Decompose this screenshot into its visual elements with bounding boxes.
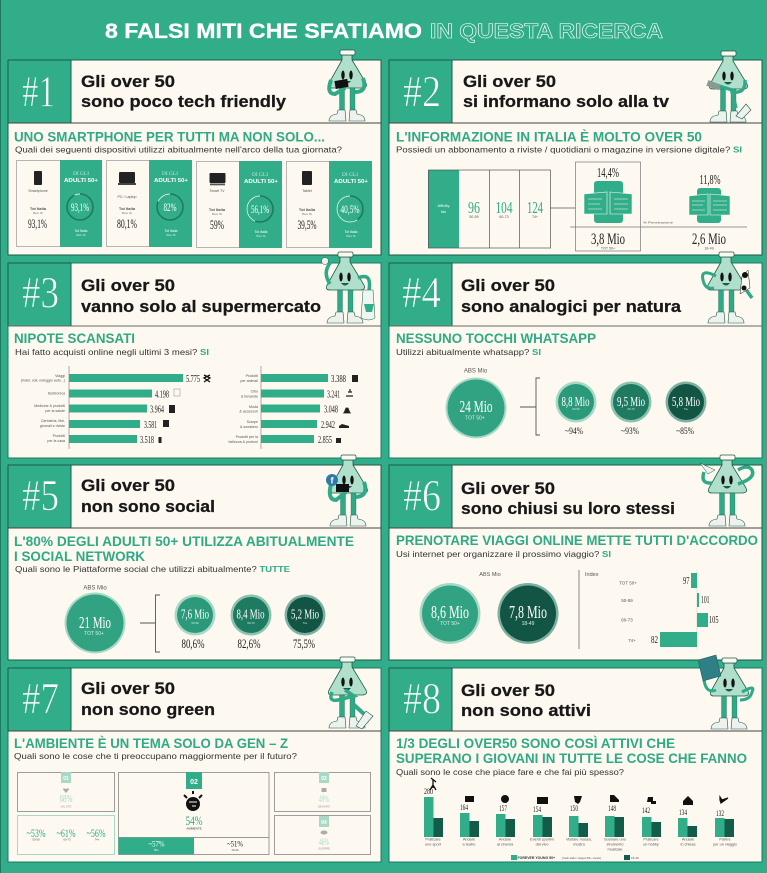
card: PC / laptop: DI GLI — [162, 171, 178, 177]
number: #8 — [403, 674, 441, 723]
heading: Gli over 50 — [461, 682, 555, 700]
heading: sono poco tech friendly — [81, 93, 287, 111]
card: smartphone: Tot Italia — [30, 206, 47, 211]
heading — [461, 480, 675, 518]
heading: vanno solo al supermercato — [81, 298, 321, 316]
heading — [81, 277, 321, 316]
card: smartphone: Tot Italia — [74, 229, 88, 233]
circles: TOT 50+ — [440, 621, 460, 627]
card: age breakdown: ~56% — [86, 826, 106, 840]
index chart — [585, 570, 718, 649]
index chart: 101 — [701, 595, 710, 606]
subheading: NESSUNO TOCCHI WHATSAPP — [396, 330, 596, 346]
bar chart: left: (hotel, voli, noleggio auto...) — [21, 378, 65, 382]
bar chart: left: Elettronica — [48, 392, 65, 396]
age circles: 8,8 Mio — [562, 395, 590, 410]
legend: 18-49 — [631, 856, 639, 860]
bar chart: activities: Andare — [499, 838, 511, 842]
bar chart: activities: Andare — [463, 838, 475, 842]
bar chart: activities: Eventi sportivi — [530, 838, 554, 842]
number: #7 — [22, 674, 59, 723]
heading — [81, 477, 215, 516]
number: #1 — [22, 67, 55, 116]
bar chart: activities: 157 — [499, 803, 507, 813]
age circles: 74+ — [684, 407, 689, 411]
bar chart: right: 3.048 — [324, 404, 338, 416]
index chart: TOT 50+ — [619, 580, 637, 586]
bar chart: left: 4.198 — [155, 390, 169, 400]
card: smart TV: Tot Italia — [254, 230, 268, 234]
card: salute: 01 — [63, 776, 69, 782]
affinity table: Affinity — [438, 203, 449, 208]
age circles: 9,5 Mio — [617, 395, 645, 410]
card: denaro: 49% — [319, 794, 329, 804]
heading: sono analogici per natura — [461, 298, 682, 316]
card: tablet: Pen. % — [302, 212, 312, 216]
age circles — [556, 382, 706, 436]
subheading — [14, 533, 354, 564]
question: Quali dei seguenti dispositivi utilizzi abitualmente nell'arco della tua giornata? — [15, 144, 342, 154]
bar chart: activities: mostra — [573, 842, 586, 846]
subheading: L'80% DEGLI ADULTI 50+ UTILIZZA ABITUALMENTE — [14, 533, 354, 549]
total circle: 21 Mio — [79, 613, 111, 632]
bar chart: right: & accessori — [239, 410, 258, 414]
card: tablet: DI GLI — [342, 172, 358, 178]
bar chart: right: Scarpe — [247, 420, 258, 424]
heading: Gli over 50 — [81, 477, 175, 495]
card: smart TV — [196, 161, 282, 248]
mascot: flask reading — [706, 51, 751, 122]
total circle: ABS Mio — [464, 368, 488, 374]
number: #6 — [403, 471, 441, 520]
number: #2 — [403, 67, 441, 116]
bar chart: activities: 154 — [533, 804, 541, 814]
legend — [511, 855, 639, 860]
card: tablet: Tablet — [302, 189, 312, 193]
icon: earth — [184, 791, 202, 811]
card: PC / laptop: 82% — [164, 200, 176, 214]
panel: #3 supermercato — [8, 252, 381, 458]
heading: non sono green — [81, 701, 215, 719]
card: age breakdown: 60-73 — [63, 838, 71, 842]
card: smart TV: DI GLI — [252, 172, 268, 178]
age circles: 60-73 — [627, 407, 635, 411]
question: Quali sono le Piattaforme social che utilizzi abitualmente? TUTTE — [15, 564, 290, 574]
affinity table: 104 — [496, 198, 512, 217]
subheading: L'INFORMAZIONE IN ITALIA È MOLTO OVER 50 — [396, 128, 702, 144]
bar chart: right: 2.942 — [321, 420, 335, 431]
heading — [81, 680, 215, 719]
mascot: flask pointing — [700, 455, 753, 526]
card: age breakdown: ~61% — [56, 826, 76, 840]
bar chart: left: Viaggi — [55, 374, 65, 378]
age circles: ~93% — [621, 426, 639, 436]
heading: non sono social — [81, 498, 215, 516]
bar chart: left: 3.518 — [140, 435, 154, 446]
panel: #5 social — [8, 455, 381, 660]
subheading: L'AMBIENTE È UN TEMA SOLO DA GEN – Z — [14, 735, 288, 751]
bar chart: activities: 132 — [716, 808, 724, 818]
card: salute: SALUTE — [61, 804, 72, 808]
affinity table: 124 — [527, 198, 543, 217]
bar chart: activities: al cinema — [497, 842, 514, 846]
panel: #1 tech friendly — [8, 50, 381, 255]
card: smartphone: ADULTI 50+ — [64, 178, 98, 184]
bar chart: right: bellezza & profumi — [228, 440, 258, 444]
heading: sono chiusi su loro stessi — [461, 500, 675, 518]
bar chart: activities: 148 — [608, 803, 616, 813]
question: Hai fatto acquisti online negli ultimi 3 mesi? SI — [15, 347, 209, 357]
bar chart: left: 3.581 — [144, 420, 157, 431]
bar chart: activities: per un viaggio — [713, 842, 737, 846]
bar chart: activities: 164 — [460, 802, 468, 812]
bracket — [520, 378, 540, 435]
card: smart TV: Pen. % — [212, 212, 222, 216]
bar chart: activities: un hobby — [643, 842, 659, 846]
stat: 18-49 digital readers: 2,6 Mio — [692, 231, 726, 248]
panel: #7 green — [8, 657, 381, 862]
total circle: TOT 50+ — [465, 416, 485, 422]
card: ambiente — [118, 772, 269, 854]
card: tablet: Tot Italia — [299, 207, 316, 212]
bar chart: activities: in chiesa — [680, 842, 696, 846]
subheading: 1/3 DEGLI OVER50 SONO COSÌ ATTIVI CHE — [396, 735, 675, 751]
question: Utilizzi abitualmente whatsapp? SI — [396, 347, 541, 357]
card: PC / laptop: Pen. % — [166, 233, 176, 237]
age circles: 5,8 Mio — [672, 395, 700, 410]
bar chart: activities: 134 — [679, 807, 687, 817]
heading — [463, 73, 670, 111]
stat: 50+ digital readers: 14,4% — [597, 166, 619, 181]
total circle — [64, 586, 126, 654]
card: tablet: 39,5% — [298, 218, 316, 232]
heading: Gli over 50 — [461, 480, 555, 498]
bar chart: activities: Andare — [682, 838, 694, 842]
bar chart: activities: musicale — [608, 848, 622, 852]
bar chart: left: 3.964 — [150, 404, 164, 416]
card: salute — [18, 772, 114, 812]
card: PC / laptop: ADULTI 50+ — [154, 178, 188, 184]
heading: non sono attivi — [461, 702, 591, 720]
bar chart: activities: Partire — [719, 838, 731, 842]
heading — [461, 682, 591, 720]
bar chart: activities: Visitare museo, — [566, 838, 592, 842]
card: smart TV: Pen. % — [256, 234, 266, 238]
bar chart: activities: Praticare — [425, 838, 441, 842]
number: #4 — [402, 268, 441, 317]
total circle: TOT 50+ — [84, 631, 104, 637]
heading — [461, 277, 682, 316]
affinity table — [428, 170, 575, 248]
card: age breakdown: ~53% — [26, 826, 46, 840]
card: PC / laptop: PC / Laptop — [118, 195, 136, 199]
card: age breakdown: 74+ — [95, 838, 100, 842]
bar chart: right: 2.855 — [318, 435, 332, 446]
card: tablet: Pen. % — [346, 234, 356, 238]
circles — [420, 572, 558, 644]
index chart: 74+ — [628, 638, 636, 643]
circles: 7,8 Mio — [509, 602, 547, 622]
bar chart: right: Prodotti per la — [236, 435, 258, 439]
affinity table: idx — [441, 209, 446, 214]
bar chart: left: per la salute — [45, 409, 65, 413]
card: guerre: GUERRE — [318, 846, 330, 850]
age circles: 80,6% — [182, 637, 204, 651]
subheading: SUPERANO I GIOVANI IN TUTTE LE COSE CHE FANNO — [396, 750, 747, 766]
panel: #8 attivi — [389, 655, 762, 862]
bar chart: right: 3.241 — [327, 390, 340, 400]
card: ambiente: ~57% — [148, 838, 164, 848]
heading: Gli over 50 — [81, 680, 175, 698]
affinity table: 74+ — [532, 215, 538, 219]
bar chart: activities: 150 — [570, 803, 578, 813]
age circles: 82,6% — [238, 637, 260, 651]
card: smartphone: Smartphone — [28, 189, 48, 193]
question: Usi internet per organizzare il prossimo viaggio? SI — [396, 549, 611, 559]
title: 8 FALSI MITI CHE SFATIAMO — [105, 20, 422, 43]
card: smart TV: 56,1% — [251, 202, 269, 216]
card: age breakdown — [18, 816, 114, 854]
affinity table: 96 — [468, 198, 480, 217]
stat: 50+ digital readers — [576, 162, 640, 251]
card: PC / laptop: Pen. % — [122, 211, 132, 215]
heading: si informano solo alla tv — [463, 93, 670, 111]
age circles: 5,2 Mio — [291, 608, 319, 622]
heading: Gli over 50 — [463, 73, 556, 91]
heading — [81, 73, 287, 111]
bar chart: left: giornali e riviste — [40, 424, 65, 428]
index chart: 82 — [651, 635, 658, 646]
card: PC / laptop — [106, 160, 192, 247]
card: guerre: 46% — [319, 837, 329, 847]
card: smart TV: Tot Italia — [209, 207, 226, 212]
card: smart TV: 59% — [210, 218, 224, 232]
title: IN QUESTA RICERCA — [430, 20, 663, 43]
title — [105, 20, 663, 43]
stat: 50+ digital readers: 3,8 Mio — [591, 231, 625, 248]
affinity table: 50-59 — [469, 215, 479, 219]
age circles: 60-73 — [247, 621, 255, 625]
stat: 18-49 digital readers: 18-49 — [704, 246, 714, 250]
number: #5 — [22, 471, 59, 520]
subheading: PRENOTARE VIAGGI ONLINE METTE TUTTI D'ACCORDO — [396, 532, 758, 548]
bar chart: activities — [424, 778, 737, 852]
total circle — [446, 368, 506, 438]
bar chart: right: Cibo — [251, 390, 258, 394]
card: ambiente: 02 — [190, 779, 198, 786]
mascot: flask with facebook badge — [326, 455, 368, 526]
card: ambiente: 50+ — [154, 848, 159, 852]
bar chart: activities: 280 — [424, 786, 433, 796]
subheading — [396, 735, 747, 766]
card: tablet — [286, 161, 372, 248]
legend: FOREVER YOUNG 50+ — [518, 856, 555, 860]
bar chart: left — [21, 366, 210, 449]
circles: 8,6 Mio — [431, 602, 469, 622]
bar chart: right — [228, 366, 358, 449]
bar chart: right: per animali — [240, 379, 258, 383]
card: PC / laptop: Tot Italia — [119, 206, 136, 211]
circles: ABS Mio — [479, 572, 501, 578]
card: smartphone — [16, 160, 102, 247]
stat: 18-49 digital readers — [689, 173, 730, 250]
total circle: 24 Mio — [460, 397, 492, 416]
subheading: UNO SMARTPHONE PER TUTTI MA NON SOLO... — [14, 128, 325, 144]
mascot: flask walking — [328, 657, 373, 729]
card: age breakdown: 50-59 — [32, 838, 40, 842]
affinity table: 60-73 — [499, 215, 509, 219]
age circles: 50-59 — [191, 621, 199, 625]
subheading: NIPOTE SCANSATI — [14, 330, 135, 346]
heading: Gli over 50 — [461, 277, 555, 295]
bar chart: left: per la casa — [47, 439, 65, 443]
card: smartphone: DI GLI — [73, 171, 89, 177]
panel: #4 analogici — [389, 252, 762, 458]
age circles: 7,6 Mio — [181, 608, 209, 622]
card: smartphone: Pen. % — [76, 233, 86, 237]
age circles: 8,4 Mio — [236, 608, 264, 622]
bar chart: activities: uno sport — [425, 842, 442, 846]
mascot: flask with shopping bag — [322, 252, 375, 323]
mascot: flask with smartphone — [328, 50, 366, 121]
age circles: ~85% — [676, 426, 694, 436]
card: tablet: ADULTI 50+ — [334, 179, 368, 185]
age circles: 74+ — [303, 621, 308, 625]
mascot: flask with spotted object — [703, 252, 752, 323]
circles: 18-49 — [522, 621, 535, 627]
card: PC / laptop: 80,1% — [117, 217, 137, 231]
bar chart: right: 3.388 — [331, 374, 346, 385]
card: ambiente: 18-49 — [231, 848, 239, 852]
stat: 18-49 digital readers: 11,8% — [700, 173, 721, 188]
card: smartphone: 93,1% — [71, 200, 89, 214]
card: denaro: 03 — [321, 776, 327, 782]
index chart: 97 — [683, 576, 690, 587]
card: ambiente: ~51% — [227, 838, 243, 848]
card: smart TV: ADULTI 50+ — [244, 179, 278, 185]
question: Quali sono le cose che piace fare e che fai più spesso? — [396, 767, 624, 777]
card: tablet: Tot Italia — [344, 230, 358, 234]
index chart: 50-59 — [621, 598, 633, 603]
card: ambiente: AMBIENTE — [186, 826, 202, 830]
age circles — [174, 594, 326, 651]
bar chart: activities: a teatro — [463, 842, 475, 846]
question: Possiedi un abbonamento a riviste / quotidiani o magazine in versione digitale? SI — [396, 144, 742, 154]
bar chart: right: & sneakers — [240, 425, 258, 429]
bracket — [140, 595, 160, 652]
bar chart: left: Cartoleria, libri, — [41, 419, 65, 423]
bar chart: activities: Praticare — [643, 838, 659, 842]
heading: Gli over 50 — [81, 277, 175, 295]
mascot: flask with facebook badge: f — [330, 476, 334, 486]
card: salute: 68% — [60, 794, 72, 805]
bar chart: left: Medicine & prodotti — [34, 404, 65, 408]
penetration label: % Penetrazione — [643, 220, 673, 224]
card: ambiente: 54% — [186, 814, 202, 828]
age circles: 50-59 — [572, 407, 580, 411]
card: smartphone: 93,1% — [28, 217, 47, 231]
index chart: Index — [585, 572, 599, 578]
card: guerre: 04 — [321, 820, 327, 826]
mascot: flask with book — [698, 655, 753, 729]
bar chart: activities: dal vivo — [536, 842, 548, 846]
card: guerre — [274, 816, 370, 854]
legend: (Vedi slide i target 50+ vivaci) — [562, 856, 601, 860]
subheading: I SOCIAL NETWORK — [14, 548, 145, 564]
bar chart: left: 5.775 — [186, 374, 200, 385]
index chart: 105 — [709, 615, 718, 626]
total circle: ABS Mio — [83, 586, 107, 592]
panel: #2 tv — [389, 51, 762, 255]
card: tablet: 40,5% — [340, 202, 360, 216]
index chart: 60-73 — [621, 618, 633, 622]
bar chart: right: Prodotti — [246, 374, 258, 378]
card: PC / laptop: Tot Italia — [164, 229, 178, 233]
question: Quali sono le cose che ti preoccupano maggiormente per il futuro? — [14, 751, 297, 761]
panel: #6 chiusi — [389, 455, 762, 660]
bar chart: left: Prodotti — [53, 434, 65, 438]
heading: Gli over 50 — [81, 73, 175, 91]
card: smart TV: Smart TV — [209, 189, 225, 193]
stat: 50+ digital readers: TOT 50+ — [601, 246, 615, 250]
bar chart: right: Moda — [249, 405, 258, 409]
card: denaro — [274, 772, 370, 812]
card: denaro: DENARO — [318, 804, 331, 808]
card: smartphone: Pen. % — [33, 211, 43, 215]
age circles: 75,5% — [293, 637, 315, 651]
number: #3 — [22, 268, 59, 317]
bar chart: activities: strumento — [607, 842, 623, 846]
age circles: ~94% — [565, 426, 583, 436]
bar chart: right: & bevande — [241, 394, 258, 398]
bar chart: activities: 142 — [642, 805, 650, 815]
bar chart: activities: Suonare uno — [604, 838, 626, 842]
